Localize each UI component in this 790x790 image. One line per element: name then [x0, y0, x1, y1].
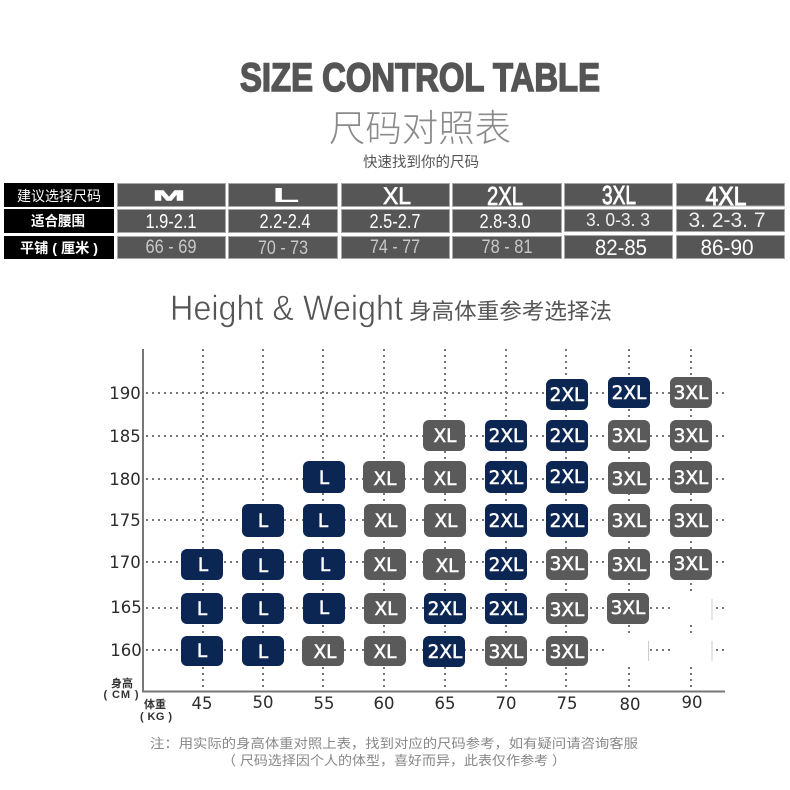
row 170 badges: 2XL [489, 555, 524, 576]
row: waist: 2.5-2.7 [370, 211, 420, 233]
row 165 badges: 3XL [550, 600, 585, 621]
row 190 badges [546, 377, 712, 410]
row: waist: 适合腰围 [31, 213, 85, 229]
axis unit: weight: ( KG ) [140, 711, 172, 723]
row 175 badges: L [258, 511, 269, 532]
blank patches [607, 593, 712, 667]
row 175 badges: 3XL [674, 511, 709, 532]
row: recommended size: M [153, 188, 185, 204]
row 160 badges: 3XL [550, 642, 585, 663]
row: flat measurement: 70 - 73 [258, 238, 308, 259]
size chart [104, 349, 725, 723]
row 165 badges: XL [375, 599, 398, 620]
row: flat measurement: 78 - 81 [482, 237, 532, 258]
row: waist: 3. 2-3. 7 [688, 209, 766, 232]
y axis labels: 160 [110, 641, 142, 660]
row 180 badges: XL [434, 469, 457, 490]
row: flat measurement: 74 - 77 [370, 237, 420, 258]
row 165 badges [181, 593, 649, 624]
x axis labels: 80 [620, 695, 640, 714]
row: waist: 2.8-3.0 [480, 211, 530, 233]
y axis labels: 165 [110, 598, 142, 617]
axis unit: height [104, 676, 139, 701]
row 170 badges: 3XL [612, 555, 647, 576]
row 170 badges: L [320, 555, 331, 576]
footnote: 注：用实际的身高体重对照上表，找到对应的尺码参考，如有疑问请咨询客服 [150, 736, 638, 751]
row: flat measurement [4, 235, 784, 260]
row 185 badges [423, 420, 712, 451]
heading: height and weight: 身高体重参考选择法 [409, 299, 612, 324]
heading: height and weight: Height & Weight [170, 289, 403, 328]
row: flat measurement: 66 - 69 [146, 237, 196, 258]
row 170 badges: L [198, 555, 209, 576]
row: recommended size: 4XL [706, 181, 746, 211]
y axis labels: 180 [109, 470, 141, 489]
row 160 badges: XL [374, 642, 397, 663]
x axis labels: 70 [496, 694, 516, 713]
x axis labels: 55 [314, 694, 334, 713]
row 190 badges: 2XL [612, 383, 647, 404]
row: waist: 2.2-2.4 [260, 211, 310, 233]
x axis labels: 50 [252, 693, 274, 712]
x axis labels: 65 [434, 694, 456, 713]
row 185 badges: XL [434, 426, 457, 447]
row 160 badges: 2XL [428, 642, 463, 663]
x axis labels: 60 [374, 694, 394, 713]
row 175 badges: 3XL [612, 511, 647, 532]
row 180 badges: 3XL [674, 468, 709, 489]
row 165 badges: L [258, 599, 269, 620]
subtitle: size chart: 尺码对照表 [329, 108, 511, 149]
axes [143, 349, 725, 692]
row: waist: 1.9-2.1 [146, 211, 196, 233]
row 180 badges: L [319, 468, 330, 489]
row 170 badges: 3XL [550, 554, 585, 575]
y axis labels [109, 384, 142, 660]
row 185 badges: 2XL [550, 426, 585, 447]
row 160 badges: 3XL [489, 642, 524, 663]
x axis labels [192, 693, 702, 714]
row 175 badges: XL [435, 511, 458, 532]
x axis labels: 75 [556, 694, 578, 713]
row 180 badges: XL [374, 469, 397, 490]
row 190 badges: 2XL [550, 385, 585, 406]
row 175 badges: 2XL [550, 511, 585, 532]
row: flat measurement: 86-90 [700, 235, 754, 260]
axis unit: weight [140, 697, 172, 723]
axis unit: height: ( CM ) [104, 689, 139, 701]
y axis labels: 190 [109, 384, 141, 403]
row 165 badges: 3XL [611, 598, 646, 619]
row 165 badges: 2XL [428, 599, 463, 620]
row: recommended size: 建议选择尺码 [17, 188, 101, 204]
row 190 badges: 3XL [674, 383, 709, 404]
row: flat measurement: 82-85 [595, 235, 647, 260]
footnote: （ 尺码选择因个人的体型，喜好而异，此表仅作参考 ） [222, 753, 566, 768]
row: recommended size: XL [383, 183, 411, 210]
axis unit: weight: 体重 [144, 697, 166, 711]
row 180 badges: 3XL [612, 469, 647, 490]
row: recommended size: 2XL [487, 181, 523, 211]
size table [4, 180, 784, 260]
row 170 badges: XL [374, 555, 397, 576]
tagline: 快速找到你的尺码 [363, 154, 479, 171]
row 175 badges: L [318, 511, 329, 532]
title: SIZE CONTROL TABLE [240, 56, 600, 100]
row 160 badges [181, 636, 588, 667]
row 185 badges: 2XL [489, 426, 524, 447]
row: recommended size: L [272, 185, 300, 207]
row 175 badges: 2XL [489, 511, 524, 532]
row 185 badges: 3XL [674, 426, 709, 447]
row 165 badges: L [197, 599, 208, 620]
row 160 badges: L [258, 642, 269, 663]
row 175 badges: XL [375, 511, 398, 532]
y axis labels: 175 [109, 511, 141, 530]
x axis labels: 90 [682, 693, 702, 712]
row 185 badges: 3XL [612, 426, 647, 447]
row 165 badges: L [319, 598, 330, 619]
x axis labels: 45 [192, 694, 212, 713]
row 175 badges [242, 504, 712, 537]
row 180 badges [303, 461, 712, 494]
y axis labels: 185 [109, 427, 141, 446]
chart grid [146, 349, 725, 690]
row 170 badges [181, 549, 712, 580]
row 170 badges: L [258, 556, 269, 577]
row 165 badges: 2XL [489, 599, 524, 620]
row 180 badges: 2XL [489, 468, 524, 489]
row 160 badges: L [197, 641, 208, 662]
row 170 badges: XL [436, 556, 459, 577]
row: recommended size: 3XL [602, 180, 636, 210]
row: recommended size [4, 180, 784, 211]
row 180 badges: 2XL [550, 467, 585, 488]
row: waist [4, 209, 784, 233]
row: waist: 3. 0-3. 3 [586, 210, 650, 230]
y axis labels: 170 [109, 553, 141, 572]
row 160 badges: XL [314, 642, 337, 663]
axis unit: height: 身高 [111, 676, 133, 690]
row: flat measurement: 平铺 ( 厘米 ) [20, 240, 98, 256]
footnote [150, 736, 638, 768]
row 170 badges: 3XL [674, 554, 709, 575]
heading: height and weight [170, 289, 612, 328]
